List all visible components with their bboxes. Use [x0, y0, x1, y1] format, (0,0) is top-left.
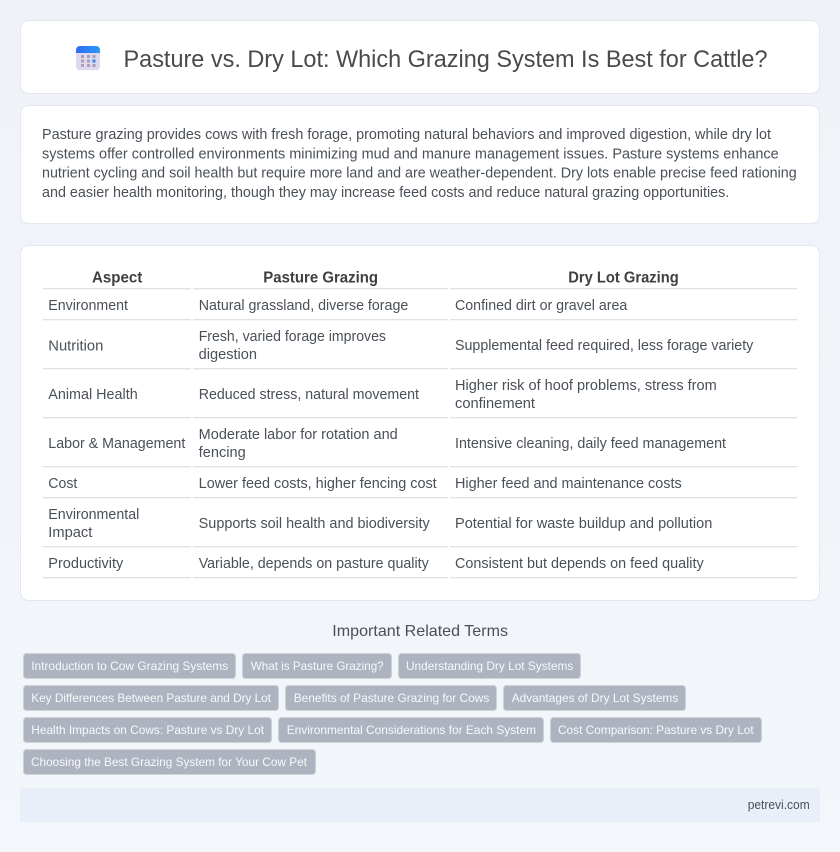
table row: Environmental Impact: Supports soil health and biodiversity: [199, 516, 430, 532]
table row: Labor and Management: Intensive cleaning, daily feed management: [455, 436, 726, 452]
table row: Animal Health: Higher risk of hoof problems, stress from: [455, 378, 717, 394]
table row: Productivity: Variable, depends on pasture quality: [199, 556, 429, 572]
tag: Advantages of Dry Lot Systems: Advantages of Dry Lot Systems: [512, 691, 678, 705]
heading: Important Related Terms: Important Related Terms: [332, 623, 508, 640]
table row: Nutrition: [43, 329, 797, 369]
tag: What is Pasture Grazing?: [242, 654, 392, 678]
tag: Choosing the Best Grazing System for Your Cow Pet: Choosing the Best Grazing System for Your Cow Pet: [31, 755, 308, 769]
table row: Nutrition: Nutrition: [48, 338, 103, 354]
table row: Environmental Impact: Impact: [48, 525, 92, 541]
table row: Nutrition: Supplemental feed required, less forage variety: [455, 338, 754, 354]
table row: Labor and Management: Labor & Management: [48, 436, 185, 452]
table row: Cost: Cost: [48, 476, 77, 492]
tag: Cost Comparison: Pasture vs Dry Lot: [550, 718, 762, 742]
tag: Benefits of Pasture Grazing for Cows: Benefits of Pasture Grazing for Cows: [294, 691, 489, 705]
tag: Health Impacts on Cows: Pasture vs Dry Lot: Health Impacts on Cows: Pasture vs Dry Lot: [31, 723, 265, 737]
table row: Labor and Management: [43, 427, 797, 467]
tag: What is Pasture Grazing?: What is Pasture Grazing?: [251, 659, 384, 673]
panel: introduction: [20, 106, 820, 224]
text block: introduction paragraph: Pasture grazing provides cows with fresh forage, promoting natural behaviors and improved digestion, while dry lot: [42, 127, 771, 143]
tag: Introduction to Cow Grazing Systems: Introduction to Cow Grazing Systems: [31, 659, 228, 673]
tag: Cost Comparison: Pasture vs Dry Lot: Cost Comparison: Pasture vs Dry Lot: [558, 723, 754, 737]
icon: calendar: [76, 46, 100, 70]
table row: Productivity: Productivity: [48, 556, 124, 572]
tag: Environmental Considerations for Each System: [278, 718, 544, 742]
tag: Choosing the Best Grazing System for Your Cow Pet: [24, 750, 316, 774]
tag: Health Impacts on Cows: Pasture vs Dry Lot: [24, 718, 272, 742]
table row: Environmental Impact: Potential for waste buildup and pollution: [455, 516, 712, 532]
table row: Productivity: Consistent but depends on feed quality: [455, 556, 704, 572]
table row: Animal Health: [43, 378, 797, 418]
table row: Environment: [43, 298, 797, 320]
tag: Key Differences Between Pasture and Dry Lot: [24, 686, 278, 710]
tag: Understanding Dry Lot Systems: Understanding Dry Lot Systems: [406, 659, 573, 673]
table row: Animal Health: Animal Health: [48, 387, 138, 403]
table row: Environment: Natural grassland, diverse forage: [199, 298, 408, 314]
table header row: Dry Lot Grazing: [568, 270, 679, 287]
text block: introduction paragraph: and easier health monitoring, though they may increase feed costs and reduce natural grazing opportunities.: [42, 185, 729, 201]
tag: Introduction to Cow Grazing Systems: [24, 654, 236, 678]
tag: Benefits of Pasture Grazing for Cows: [286, 686, 496, 710]
footer: [20, 788, 820, 822]
panel: related term tags: [24, 654, 762, 774]
table header row: Pasture Grazing: [263, 270, 378, 287]
table row: Animal Health: Reduced stress, natural movement: [199, 387, 419, 403]
table row: Labor and Management: fencing: [199, 445, 246, 461]
table row: Nutrition: digestion: [199, 347, 257, 363]
tag: Environmental Considerations for Each System: Environmental Considerations for Each System: [287, 723, 536, 737]
text block: introduction paragraph: [42, 127, 797, 201]
panel: comparison table: [20, 246, 820, 600]
footer source text: petrevi.com: [748, 797, 810, 812]
table row: Animal Health: confinement: [455, 396, 535, 412]
table row: Cost: [43, 476, 797, 498]
table row: Labor and Management: Moderate labor for rotation and: [199, 427, 398, 443]
table row: Environment: Confined dirt or gravel area: [455, 298, 627, 314]
table row: Productivity: [43, 556, 797, 578]
tag: Advantages of Dry Lot Systems: [504, 686, 686, 710]
table row: Environmental Impact: Environmental: [48, 507, 139, 523]
text block: introduction paragraph: nutrient cycling and soil health but require more land and are weather-dependent. Dry lots enable precise feed rationing: [42, 166, 797, 182]
table header row: Aspect: [92, 270, 143, 287]
table row: Nutrition: Fresh, varied forage improves: [199, 329, 386, 345]
tag: Key Differences Between Pasture and Dry Lot: Key Differences Between Pasture and Dry Lot: [31, 691, 272, 705]
panel: title header: [20, 20, 820, 94]
tag: Understanding Dry Lot Systems: [398, 654, 580, 678]
table row: Cost: Higher feed and maintenance costs: [455, 476, 682, 492]
table header row: [43, 270, 797, 289]
table row: Cost: Lower feed costs, higher fencing cost: [199, 476, 437, 492]
text block: introduction paragraph: systems offer controlled environments minimizing mud and manure management issues. Pasture systems enhance: [42, 146, 779, 162]
table row: Environment: Environment: [48, 298, 128, 314]
title: Pasture vs. Dry Lot: Which Grazing System Is Best for Cattle?: [124, 46, 768, 73]
table row: Environmental Impact: [43, 507, 797, 547]
